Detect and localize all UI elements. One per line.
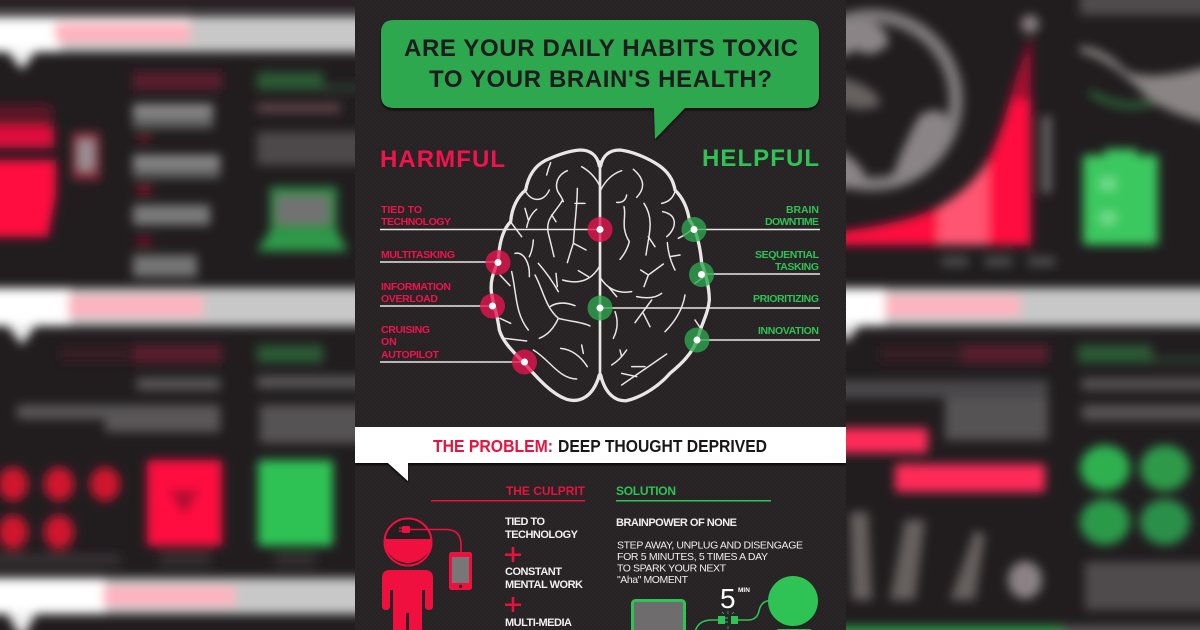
culprit list: CONSTANT <box>505 566 562 578</box>
helpful labels: PRIORITIZING <box>753 293 819 305</box>
heading: solution: SOLUTION <box>616 484 676 498</box>
banner: the problem <box>355 427 846 481</box>
helpful labels: INNOVATION <box>758 325 819 337</box>
icon: unplugged cable <box>695 600 776 630</box>
harmful labels: INFORMATION <box>381 281 451 293</box>
harmful labels: TECHNOLOGY <box>381 216 451 228</box>
icon: person tethered to phone <box>382 518 472 630</box>
helpful labels: DOWNTIME <box>765 216 819 228</box>
culprit list: TIED TO <box>505 516 545 528</box>
culprit list: MULTI-MEDIA <box>505 617 572 629</box>
harmful labels: MULTITASKING <box>381 249 455 261</box>
harmful labels <box>381 204 455 361</box>
speech bubble title: TO YOUR BRAIN'S HEALTH? <box>429 66 772 93</box>
solution text: FOR 5 MINUTES, 5 TIMES A DAY <box>617 551 768 563</box>
icon: green person <box>768 576 818 630</box>
solution text: STEP AWAY, UNPLUG AND DISENGAGE <box>617 540 803 552</box>
culprit list <box>505 516 583 629</box>
helpful labels: BRAIN <box>786 204 819 216</box>
panel background <box>355 0 846 630</box>
harmful labels: AUTOPILOT <box>381 349 440 361</box>
speech bubble title: ARE YOUR DAILY HABITS TOXIC <box>404 35 798 62</box>
five minute label: MIN <box>738 587 750 594</box>
leader lines <box>380 230 820 362</box>
banner: the problem: THE PROBLEM: <box>433 436 553 456</box>
culprit list: TECHNOLOGY <box>505 529 579 541</box>
panel: blurred right backdrop <box>788 0 1200 630</box>
five minute label <box>721 588 750 608</box>
brain illustration <box>491 150 709 401</box>
speech bubble title <box>381 20 819 139</box>
panel: central infographic <box>355 0 846 630</box>
icon: tablet <box>632 600 684 630</box>
harmful markers <box>480 217 612 374</box>
helpful markers <box>588 217 714 352</box>
harmful labels: ON <box>381 336 397 348</box>
solution text: TO SPARK YOUR NEXT <box>617 562 727 574</box>
culprit list: MENTAL WORK <box>505 579 583 591</box>
five minute label: 5 <box>720 583 736 614</box>
helpful labels: TASKING <box>775 261 819 273</box>
helpful labels <box>753 204 820 337</box>
banner: the problem: DEEP THOUGHT DEPRIVED <box>558 436 767 456</box>
heading: harmful: HARMFUL <box>380 146 505 173</box>
harmful labels: CRUISING <box>381 324 430 336</box>
solution text <box>616 517 803 586</box>
solution text: "Aha" MOMENT <box>617 574 689 586</box>
panel: blurred left backdrop <box>0 0 380 630</box>
solution text: BRAINPOWER OF NONE <box>616 517 737 529</box>
harmful labels: OVERLOAD <box>381 293 438 305</box>
helpful labels: SEQUENTIAL <box>755 249 820 261</box>
harmful labels: TIED TO <box>381 204 422 216</box>
heading: helpful: HELPFUL <box>702 145 819 172</box>
heading: the culprit: THE CULPRIT <box>506 484 586 498</box>
